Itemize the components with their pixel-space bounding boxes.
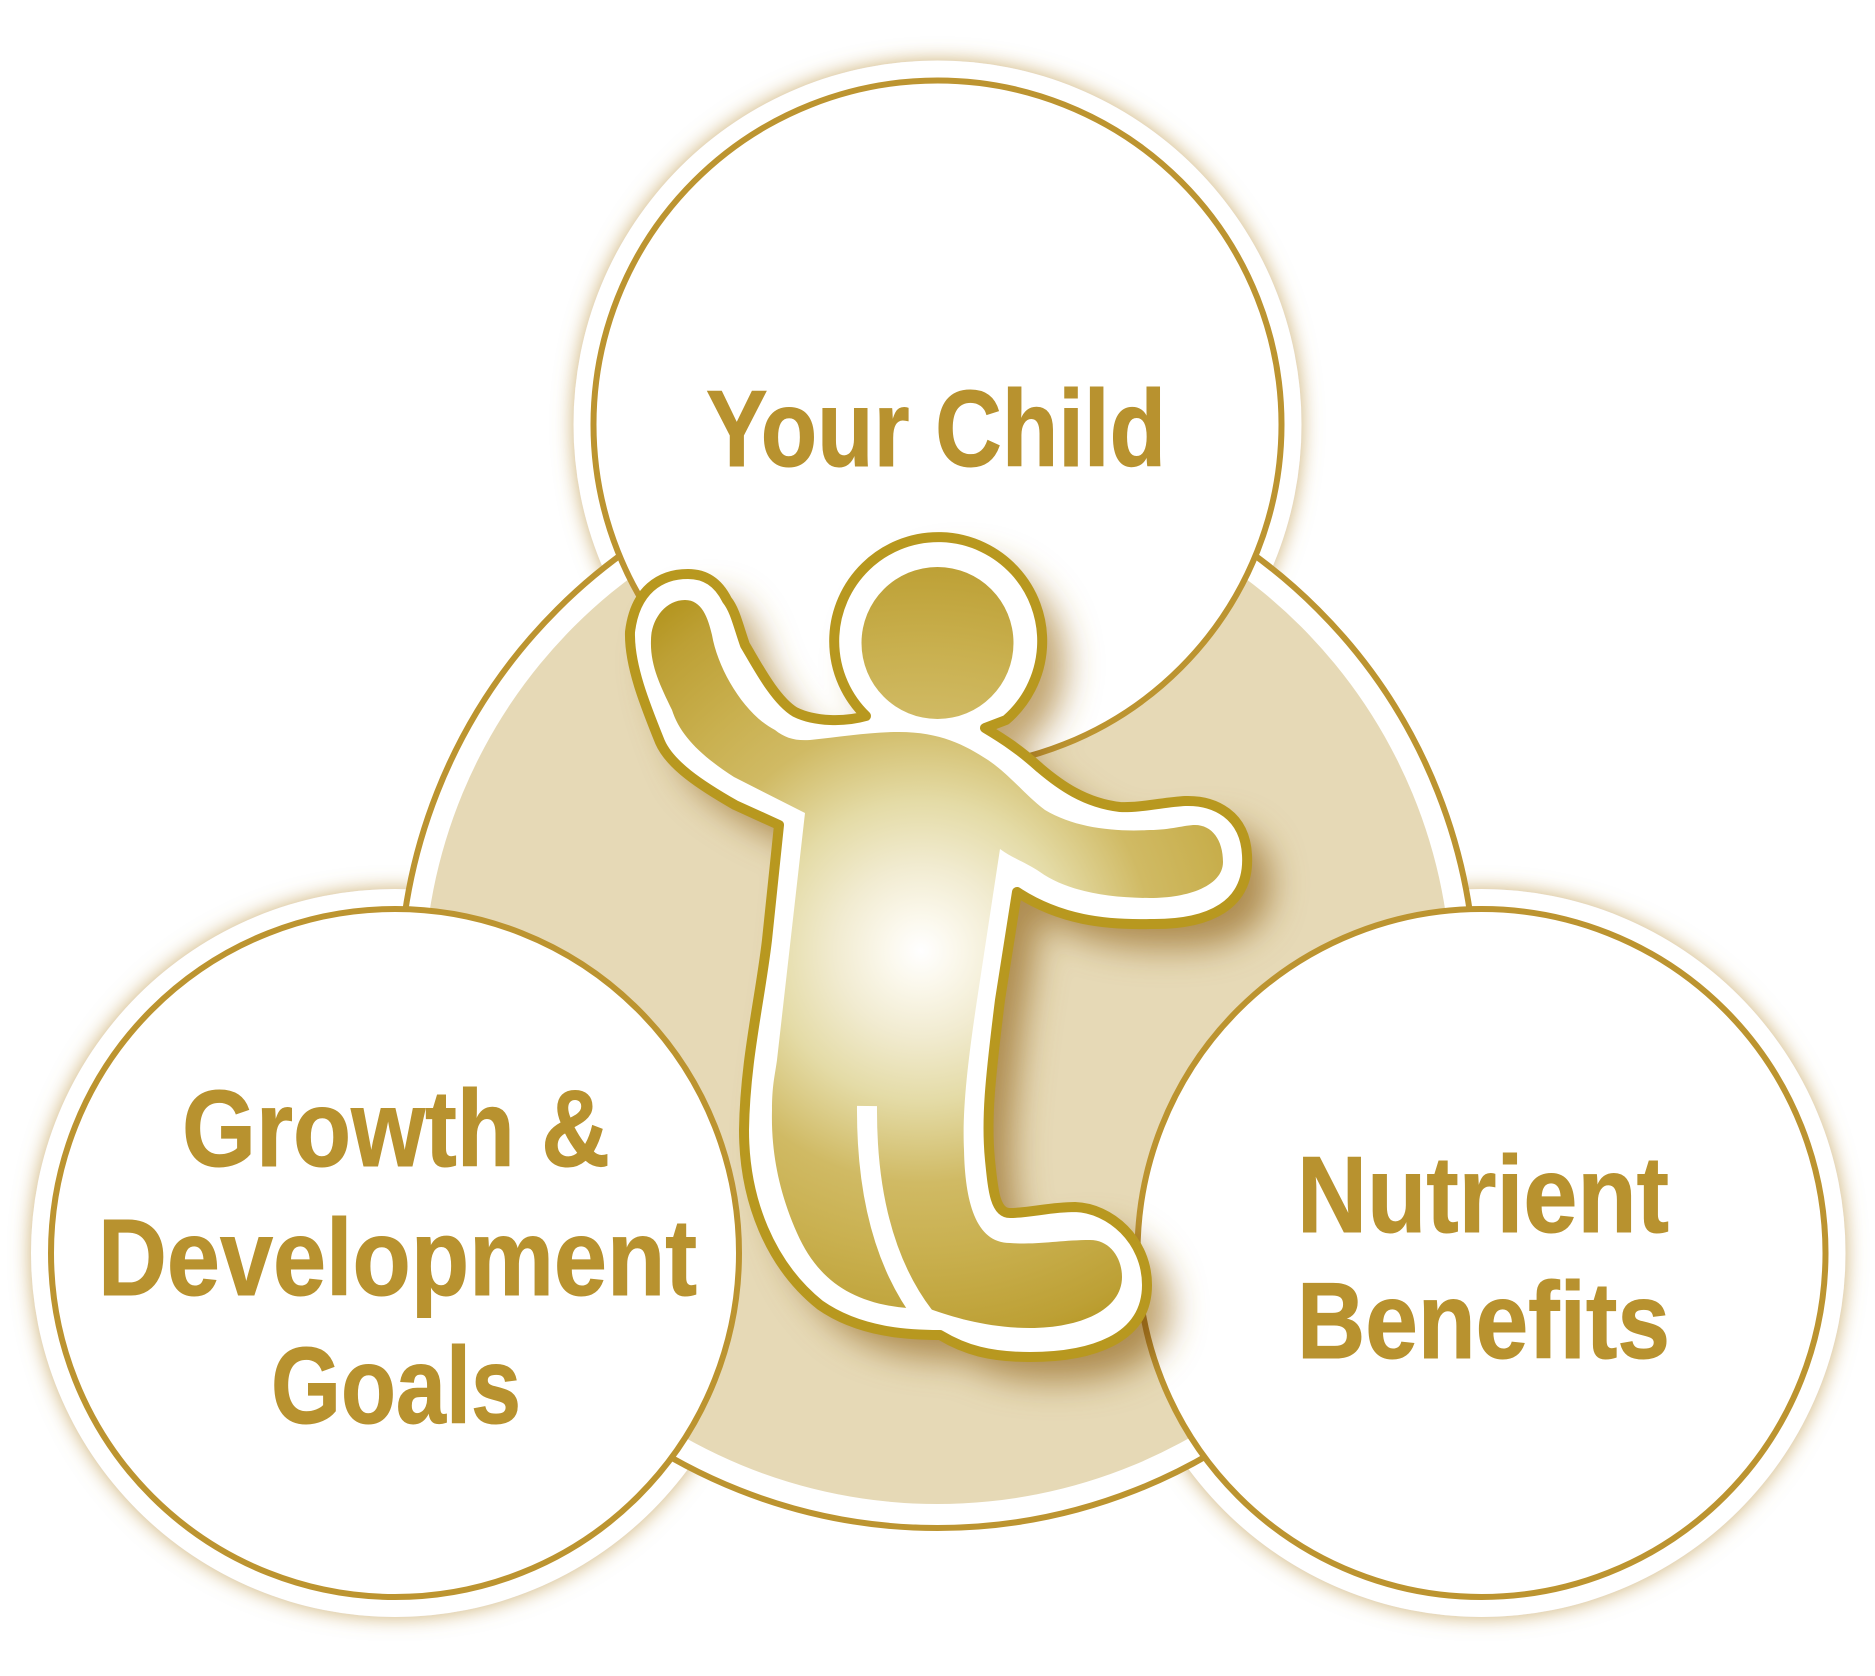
figure head — [862, 567, 1014, 719]
figure drop shadow — [654, 561, 1271, 1381]
label: Growth & Development Goals — [98, 1068, 697, 1447]
label: Growth & Development Goals: Goals — [271, 1325, 521, 1447]
label: Nutrient Benefits: Nutrient — [1297, 1134, 1669, 1256]
label: Growth & Development Goals: Growth & — [182, 1068, 610, 1190]
circle: Nutrient Benefits — [1138, 909, 1826, 1597]
figure outline — [630, 537, 1247, 1357]
circle: Your Child — [594, 80, 1282, 768]
figure leg divider — [867, 1106, 924, 1316]
label: Nutrient Benefits — [1297, 1134, 1670, 1382]
circle: Growth & Development Goals — [51, 909, 739, 1597]
label: Your Child: Your Child — [706, 368, 1166, 490]
label: Growth & Development Goals: Development — [98, 1197, 697, 1319]
label: Nutrient Benefits: Benefits — [1297, 1260, 1670, 1382]
icon: jumping child figure — [630, 537, 1271, 1381]
figure body — [651, 600, 1223, 1328]
center circle: background disc — [400, 452, 1476, 1528]
